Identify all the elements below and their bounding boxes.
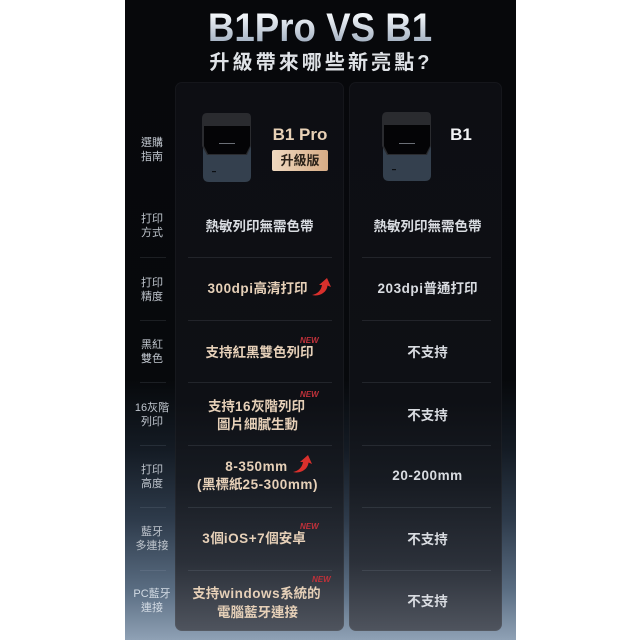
label: bluetooth: 多連接 [136,540,168,552]
B1 Pro: 16 gray printing: 圖片細膩生動 [217,417,298,432]
label: black red: 雙色 [141,353,163,365]
B1 Pro: PC bluetooth [192,586,321,620]
icon: red up arrow precision [312,278,331,296]
label: buying guide: 選購 [141,137,163,149]
B1 Pro: PC bluetooth: 電腦藍牙連接 [217,605,298,620]
label: PC bluetooth [133,588,171,614]
B1: 16 gray printing: 不支持 [407,408,448,423]
new tag: NEW [312,575,331,584]
B1 Pro: PC bluetooth: 支持windows系統的 [192,586,321,601]
label: print method: 打印 [141,213,163,225]
label: print height: 高度 [141,478,163,490]
label: print precision: 精度 [141,291,163,303]
title: B1Pro VS B1 [208,6,432,50]
label: PC bluetooth: PC藍牙 [133,588,171,600]
B1 Pro: black red printing: 支持紅黑雙色列印 [206,345,314,360]
icon: B1 Pro printer [202,113,251,182]
B1: bluetooth multi connection: 不支持 [407,532,448,547]
B1 Pro: print method: 熱敏列印無需色帶 [206,219,314,234]
B1: black red printing: 不支持 [407,345,448,360]
label: buying guide [141,136,163,163]
poster background [125,0,516,640]
B1 Pro: 16 gray printing: 支持16灰階列印 [208,399,305,414]
label: print method: 方式 [141,227,163,239]
label: print precision [141,276,163,303]
new tag: NEW [300,390,319,399]
badge: upgraded version [272,150,328,171]
label: bluetooth: 藍牙 [141,526,163,538]
B1 Pro: print height [197,459,318,492]
product name: B1 Pro: B1 Pro [273,125,327,144]
B1 Pro: print height: 8-350mm [225,459,288,474]
label: black red: 黑紅 [141,339,163,351]
B1 Pro: bluetooth multi connection: 3個iOS+7個安卓 [202,531,306,546]
badge: upgraded version: 升級版 [280,153,320,168]
icon: red up arrow height [293,455,312,472]
label: 16 gray: 列印 [141,416,163,428]
label: 16 gray: 16灰階 [135,402,169,414]
panel: B1 Pro column [175,82,344,631]
B1 Pro: print precision: 300dpi高清打印 [207,281,308,296]
label: 16 gray [135,402,169,428]
label: print precision: 打印 [141,277,163,289]
B1 Pro: 16 gray printing [208,399,305,432]
label: print height: 打印 [141,464,163,476]
B1: print method: 熱敏列印無需色帶 [374,219,482,234]
product name: B1: B1 [450,125,472,144]
B1: PC bluetooth: 不支持 [407,594,448,609]
label: black red [141,338,163,365]
label: print height [141,464,163,490]
B1: print precision: 203dpi普通打印 [377,281,478,296]
panel: B1 column [349,82,502,631]
label: buying guide: 指南 [141,151,163,163]
new tag: NEW [300,336,319,345]
B1: print height: 20-200mm [392,468,463,483]
label: print method [141,212,163,239]
new tag: NEW [300,522,319,531]
B1 Pro: print height: (黑標紙25-300mm) [197,477,318,492]
label: bluetooth [136,526,168,552]
icon: B1 printer [382,112,431,181]
label: PC bluetooth: 連接 [141,602,163,614]
subtitle: 升級帶來哪些新亮點? [209,52,433,74]
